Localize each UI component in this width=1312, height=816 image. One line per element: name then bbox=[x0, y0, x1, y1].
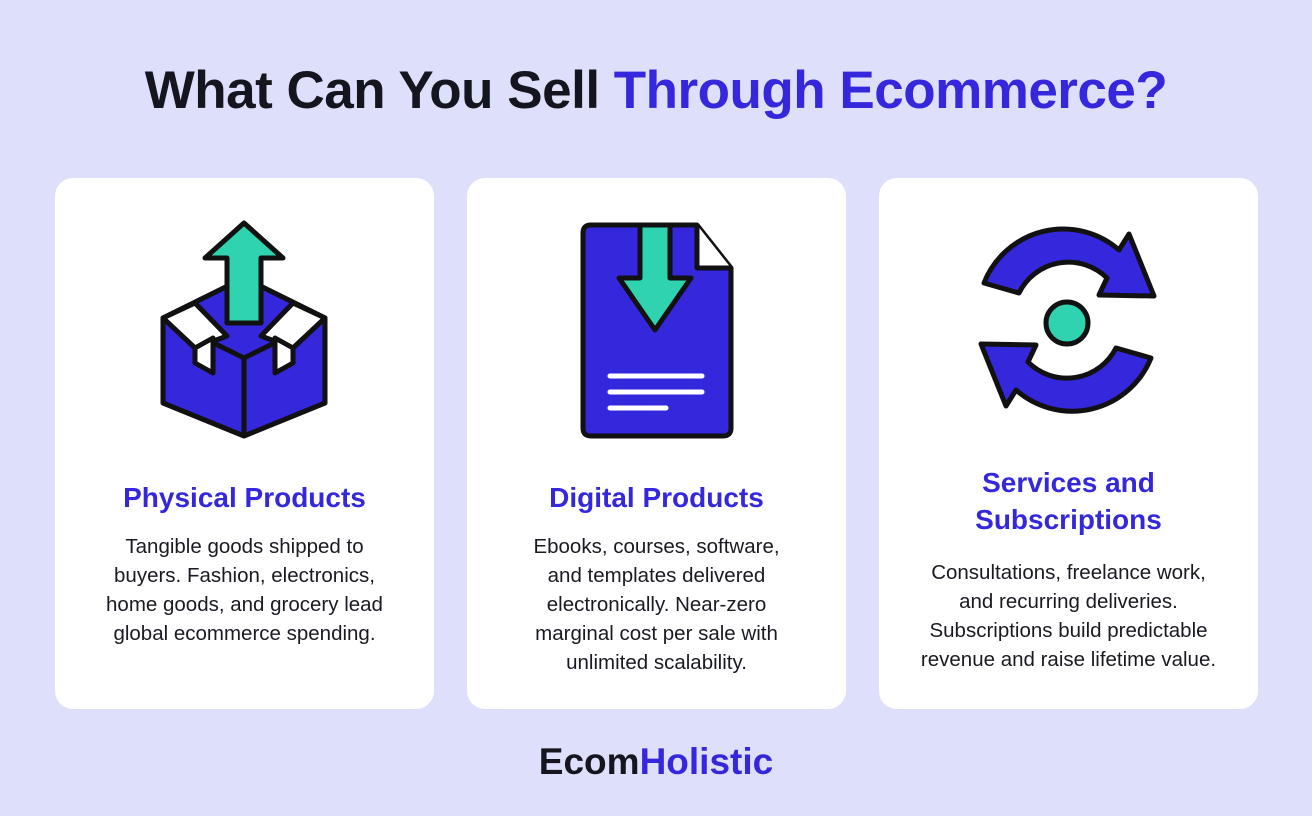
icon: cycle arrows bbox=[978, 226, 1156, 414]
panel: digital products bbox=[467, 178, 846, 709]
text bbox=[106, 535, 383, 645]
text: marginal cost per sale with bbox=[535, 622, 778, 645]
heading bbox=[975, 467, 1162, 535]
text: Consultations, freelance work, bbox=[931, 561, 1206, 584]
text: unlimited scalability. bbox=[566, 651, 747, 674]
text: Subscriptions build predictable bbox=[929, 619, 1208, 642]
text: buyers. Fashion, electronics, bbox=[114, 564, 375, 587]
logo: EcomHolistic bbox=[539, 741, 773, 782]
text: and recurring deliveries. bbox=[959, 590, 1178, 613]
heading: Subscriptions bbox=[975, 504, 1162, 535]
icon: document download bbox=[580, 222, 734, 438]
text bbox=[921, 561, 1216, 671]
icon: box with up arrow bbox=[160, 220, 328, 438]
text: revenue and raise lifetime value. bbox=[921, 648, 1216, 671]
panel: physical products bbox=[55, 178, 434, 709]
text: Tangible goods shipped to bbox=[125, 535, 364, 558]
heading: Digital Products bbox=[549, 482, 764, 513]
text: global ecommerce spending. bbox=[113, 622, 376, 645]
text: Ebooks, courses, software, bbox=[533, 535, 780, 558]
panel: services and subscriptions bbox=[879, 178, 1258, 709]
text: electronically. Near-zero bbox=[547, 593, 766, 616]
text: and templates delivered bbox=[548, 564, 765, 587]
heading: Physical Products bbox=[123, 482, 366, 513]
text: home goods, and grocery lead bbox=[106, 593, 383, 616]
heading: Services and bbox=[982, 467, 1155, 498]
text bbox=[533, 535, 780, 674]
title: What Can You Sell Through Ecommerce? bbox=[145, 61, 1167, 120]
